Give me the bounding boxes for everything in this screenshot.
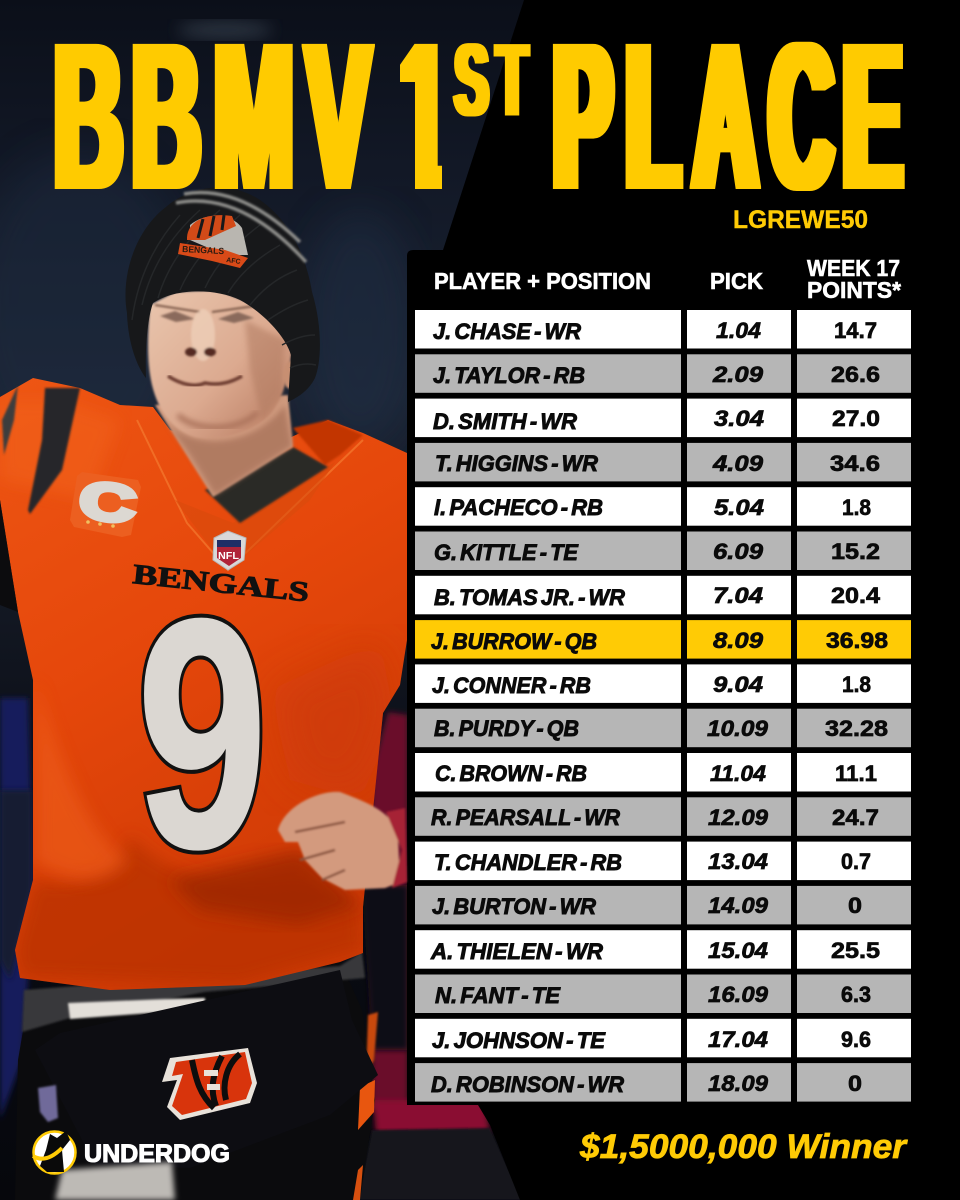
white towel strip	[68, 998, 205, 1019]
row 5: 5.04	[714, 495, 764, 520]
row 8 highlighted	[415, 620, 911, 659]
black towel	[35, 970, 378, 1168]
row 9: 9.04	[713, 672, 763, 697]
row 1: 1.04	[716, 318, 761, 343]
chin shadow	[165, 405, 292, 495]
sleeve stripes	[28, 388, 80, 514]
row 5	[415, 487, 911, 526]
row 9: 1.8	[842, 672, 871, 697]
row 1	[415, 310, 911, 348]
row 2: 2.09	[712, 362, 764, 387]
mouth	[168, 376, 242, 385]
row 3: 3.04	[714, 406, 764, 431]
row 16: 6.3	[841, 982, 871, 1007]
title: BBMV	[54, 0, 370, 233]
table header: POINTS*	[807, 277, 901, 303]
captain patch: C	[77, 471, 139, 535]
row 16	[415, 974, 911, 1013]
row 14: 14.09	[708, 893, 769, 918]
row 18: 18.09	[708, 1071, 769, 1096]
table header: PICK	[710, 268, 763, 294]
pants	[15, 960, 375, 1200]
brand logo: Underdog	[33, 1131, 230, 1174]
pants orange stripe	[358, 1080, 375, 1130]
row 6	[415, 532, 911, 570]
row 15: 15.04	[708, 938, 768, 963]
row 15	[415, 930, 911, 969]
beanie logo: BENGALS	[182, 244, 224, 256]
row 13: 13.04	[708, 849, 768, 874]
prize callout: $1,5000,000 Winner	[579, 1128, 908, 1166]
row 10: 10.09	[707, 716, 769, 741]
jersey collar V	[137, 420, 363, 570]
row 16: 16.09	[708, 982, 769, 1007]
NFL shield: NFL	[218, 551, 239, 562]
row 12: R. PEARSALL - WR	[431, 805, 621, 830]
row 6: 6.09	[713, 539, 764, 564]
row 17: J. JOHNSON - TE	[432, 1028, 606, 1053]
jersey number 9: 9	[137, 553, 267, 916]
row 11: 11.1	[835, 761, 877, 786]
cheek shading	[245, 320, 285, 420]
row 3: D. SMITH - WR	[433, 409, 578, 434]
row 9: J. CONNER - RB	[432, 673, 591, 698]
row 4: 34.6	[830, 451, 880, 476]
row 14: J. BURTON - WR	[432, 894, 597, 919]
row 2: 26.6	[831, 362, 880, 387]
pants logo	[162, 1048, 257, 1120]
row 10: 32.28	[825, 716, 888, 741]
jersey number 9: 9	[137, 553, 267, 916]
row 7: 7.04	[713, 583, 763, 608]
beanie logo	[178, 215, 248, 268]
title: PLACE	[554, 0, 902, 232]
table header	[434, 255, 901, 303]
row 2	[415, 354, 911, 393]
captain patch	[70, 471, 141, 537]
title: ST	[454, 24, 528, 138]
undershirt	[205, 447, 328, 523]
row 17	[415, 1019, 911, 1057]
row 5: 1.8	[842, 495, 871, 520]
row 6: 15.2	[831, 539, 880, 564]
beanie logo: AFC	[226, 257, 241, 266]
belt	[22, 952, 365, 1032]
title	[54, 42, 905, 191]
row 16: N. FANT - TE	[435, 983, 561, 1008]
row 11	[415, 753, 911, 792]
beanie stripes	[176, 193, 306, 262]
row 13: 0.7	[841, 849, 871, 874]
player photo illustration	[0, 187, 407, 1200]
row 3: 27.0	[832, 406, 880, 431]
row 13: T. CHANDLER - RB	[434, 850, 622, 875]
row 4: 4.09	[712, 451, 764, 476]
ear	[283, 361, 297, 389]
row 1: 14.7	[834, 318, 877, 343]
face	[148, 290, 292, 438]
row 15: A. THIELEN - WR	[430, 939, 604, 964]
row 7	[415, 576, 911, 614]
icon: dog badge	[33, 1131, 76, 1174]
eyes	[155, 305, 262, 323]
jersey shading	[0, 400, 395, 985]
row 8 highlighted: 8.09	[713, 628, 764, 653]
row 7: 20.4	[831, 583, 881, 608]
white towel bottom	[55, 1162, 175, 1200]
under sleeve	[0, 500, 18, 612]
row 11: 11.04	[710, 761, 766, 786]
row 4	[415, 443, 911, 481]
title: 1	[398, 1, 450, 233]
row 15: 25.5	[831, 938, 880, 963]
crowd: blue jacket at left	[0, 698, 34, 1120]
row 8 highlighted: J. BURROW - QB	[431, 629, 597, 654]
row 4: T. HIGGINS - WR	[435, 451, 599, 476]
row 17: 9.6	[841, 1027, 871, 1052]
hand	[278, 792, 407, 890]
table	[415, 255, 911, 1102]
row 13	[415, 842, 911, 880]
row 10	[415, 709, 911, 747]
wordmark: UNDERDOG	[84, 1140, 230, 1168]
jersey wordmark: BENGALS	[131, 559, 311, 608]
nose	[185, 309, 216, 361]
row 10: B. PURDY - QB	[434, 716, 579, 741]
row 8 highlighted: 36.98	[826, 628, 888, 653]
row 12	[415, 797, 911, 836]
row 17: 17.04	[708, 1027, 768, 1052]
table header: PLAYER + POSITION	[434, 268, 651, 294]
row 12: 12.09	[708, 805, 769, 830]
black diagonal panel	[407, 0, 960, 1200]
row 14: 0	[848, 893, 862, 918]
row 5: I. PACHECO - RB	[434, 495, 603, 520]
beanie	[125, 187, 320, 402]
row 1: J. CHASE - WR	[433, 319, 582, 344]
row 18: 0	[848, 1071, 862, 1096]
row 9	[415, 664, 911, 703]
row 18: D. ROBINSON - WR	[431, 1072, 625, 1097]
NFL pants patch	[38, 1085, 58, 1122]
table header: WEEK 17	[807, 255, 900, 281]
photo background: stadium	[0, 0, 560, 1200]
row 3	[415, 399, 911, 437]
row 12: 24.7	[832, 805, 879, 830]
row 14	[415, 886, 911, 924]
winner username: LGREWE50	[733, 206, 868, 234]
crowd: pink figure at right	[370, 712, 408, 1110]
row 11: C. BROWN - RB	[435, 761, 587, 786]
jersey body	[0, 378, 407, 990]
NFL shield	[213, 531, 246, 570]
row 6: G. KITTLE - TE	[434, 540, 579, 565]
row 7: B. TOMAS JR. - WR	[434, 585, 626, 610]
neck	[155, 395, 293, 497]
row 18	[415, 1063, 911, 1102]
row 2: J. TAYLOR - RB	[433, 363, 585, 388]
